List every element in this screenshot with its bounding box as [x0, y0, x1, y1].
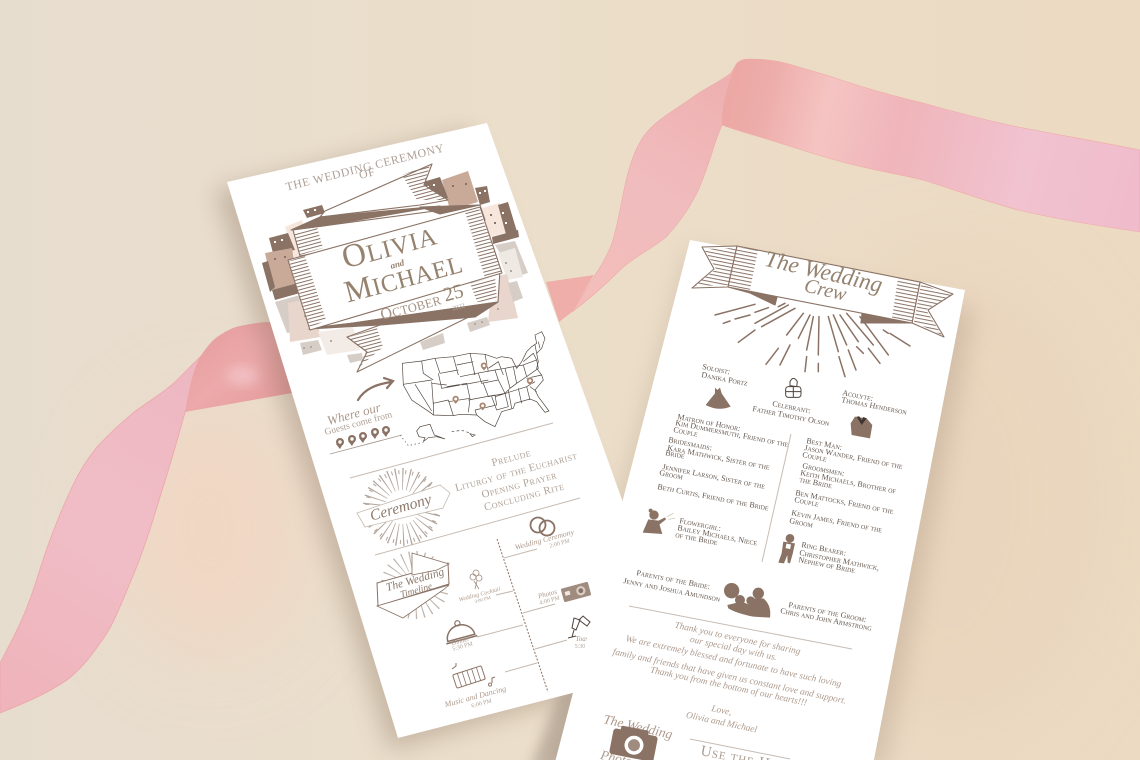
column divider	[762, 434, 791, 562]
arrow to map	[358, 378, 393, 400]
names: Olivia and Michael	[338, 216, 466, 309]
left card: ceremony program	[227, 123, 681, 738]
flower girl label: Flowergirl:	[679, 516, 722, 533]
event: dinner: 5:30 PM	[452, 641, 474, 653]
badge: ceremony	[357, 472, 450, 542]
badge: ceremony: Ceremony	[368, 491, 434, 525]
order of service list: Prelude	[490, 447, 532, 469]
map of the USA	[402, 332, 549, 427]
bride's attendants: Jennifer Larson, Sister of the	[662, 462, 766, 491]
date: October 25 2022: 2022	[451, 302, 466, 313]
ribbon: centre strand back piece	[546, 275, 594, 322]
ring bearer label: Christopher Mathwick,	[799, 548, 880, 572]
event: wedding cocktail: Wedding Cocktail	[458, 587, 501, 603]
bride's attendants: Matron of Honor:	[677, 412, 741, 433]
names: Olivia and Michael: OLIVIA	[338, 216, 441, 276]
thank you message: Thank you to everyone for sharing	[674, 620, 802, 657]
order of service list: Concluding Rite	[483, 481, 566, 514]
groom's attendants: Best Man:	[806, 436, 843, 452]
alaska and hawaii	[400, 424, 475, 446]
banner: the wedding crew	[692, 246, 953, 337]
icon: parents	[724, 583, 770, 618]
parents of the bride: Jenny and Joshua Amundson	[623, 576, 722, 604]
names: Olivia and Michael: MICHAEL	[340, 244, 466, 309]
map pins	[452, 362, 533, 411]
banner title: The Wedding	[762, 246, 885, 297]
event: dinner: Dinner	[450, 636, 471, 648]
event: toast	[568, 616, 596, 650]
solo roles: Thomas Henderson	[841, 395, 908, 417]
solo roles: Acolyte:	[842, 388, 874, 403]
thank you message: Thank you from the bottom of our hearts!!!	[649, 665, 808, 709]
groom's attendants: Kevin James, Friend of the	[791, 508, 883, 535]
solo roles: Danika Portz	[701, 370, 749, 388]
thank you message: our special day with us.	[689, 635, 778, 663]
flower girl label: Bailey Michaels, Niece	[677, 523, 758, 548]
card sheet	[553, 240, 965, 760]
groom's attendants: Jason Wander, Friend of the	[804, 443, 904, 471]
groom's attendants: Ben Mattocks, Friend of the	[795, 488, 895, 516]
bride's attendants: Beth Curtis, Friend of the Bride	[657, 482, 770, 513]
badge: the wedding timeline: The Wedding	[385, 566, 446, 594]
order of service list	[454, 447, 579, 514]
event: wedding ceremony: Wedding Ceremony	[514, 527, 575, 552]
groom's attendants: the Bride	[799, 475, 833, 490]
parents of the groom: Parents of the Groom:	[788, 600, 867, 624]
event: music and dancing	[443, 663, 507, 710]
date: October 25 2022: OCTOBER	[379, 291, 443, 324]
thank you message: Olivia and Michael	[685, 711, 758, 736]
bride's attendants: Groom	[659, 468, 684, 482]
banner title: Crew	[802, 275, 849, 306]
right card shadow on table	[545, 250, 975, 760]
event: wedding cocktail: 3:00 PM	[474, 596, 492, 605]
names: Olivia and Michael: and	[389, 257, 406, 271]
solo roles	[701, 362, 908, 428]
sunburst rays	[715, 303, 910, 377]
guest pins row	[330, 426, 402, 454]
bride's attendants: Bridesmaids:	[668, 435, 713, 452]
solo roles: Father Timothy Olson	[752, 404, 831, 428]
event: dinner	[441, 617, 477, 653]
event: toast: 5:30 PM	[575, 644, 596, 650]
bride's attendants	[657, 412, 790, 513]
where our guests come from: Guests come from	[323, 409, 394, 438]
bride's attendants: Kim Dummersmuth, Friend of the	[675, 418, 790, 449]
heading: the wedding ceremony of: THE WEDDING CEREMONY	[284, 141, 446, 194]
ribbon: left fold loop	[185, 322, 292, 412]
order of service list: Liturgy of the Eucharist	[454, 450, 579, 494]
groom's attendants: Keith Michaels, Brother of	[800, 468, 897, 496]
flower girl label: of the Bride	[675, 530, 719, 547]
ribbon: long left strand	[0, 357, 200, 713]
right card: wedding crew	[553, 240, 965, 760]
icon: jacket	[851, 416, 872, 438]
badge: the wedding timeline: Timeline	[399, 582, 434, 600]
event: wedding ceremony: 2:00 PM	[549, 538, 571, 550]
card sheet	[227, 123, 681, 738]
ring bearer label: Ring Bearer:	[801, 540, 847, 558]
order of service list: Opening Prayer	[480, 469, 558, 501]
solo roles: Celebrant:	[772, 399, 812, 415]
parents of the groom: Chris and John Armstrong	[780, 606, 873, 633]
solo roles: Soloist:	[702, 362, 731, 376]
icon: flower girl	[643, 509, 675, 534]
timeline spine and branches	[477, 539, 567, 692]
badge: the wedding timeline	[377, 553, 449, 618]
event: wedding cocktail	[458, 570, 501, 605]
date: October 25 2022	[379, 280, 466, 324]
thank you message: We are extremely blessed and fortunate to have such loving	[625, 633, 843, 690]
ribbon: centre strand	[572, 63, 737, 312]
bride's attendants: Bride	[665, 448, 686, 461]
event: photos: Photos	[536, 588, 558, 601]
event: photos	[536, 582, 591, 607]
groom's attendants: Groomsmen:	[802, 461, 845, 478]
heading: the wedding ceremony of: OF	[357, 164, 377, 182]
groom's attendants: Couple	[794, 495, 820, 509]
thank you message: family and friends that have given us constant love and support.	[612, 646, 847, 707]
icon: ring bearer	[778, 534, 795, 563]
ribbon: top right band	[722, 59, 1140, 232]
icon: camera	[609, 724, 659, 760]
groom's attendants: Couple	[802, 450, 828, 464]
event: photos: 4:00 PM	[539, 595, 561, 607]
thank you message	[612, 620, 847, 736]
wedding photos heading: The Wedding	[602, 711, 674, 742]
bride's attendants: Kara Mathwick, Sister of the	[667, 443, 771, 472]
thank you message: Love,	[709, 704, 732, 718]
left card shadow	[215, 130, 600, 750]
event: toast: Toast	[576, 635, 592, 643]
ring bearer label: Nephew of Bride	[798, 555, 856, 575]
illustration: name banner	[288, 164, 502, 372]
groom's attendants: Groom	[789, 516, 814, 530]
icon: dress	[706, 388, 731, 409]
shadow between the cards	[530, 650, 640, 760]
event: music and dancing: 6:00 PM	[471, 698, 493, 710]
where our guests come from: Where our	[325, 399, 383, 428]
icon: celebrant	[786, 378, 801, 397]
bride's attendants: Couple	[673, 425, 699, 439]
groom's attendants	[789, 436, 904, 535]
event: music and dancing: Music and Dancing	[443, 684, 507, 709]
wedding photos heading	[598, 711, 674, 760]
parents of the bride: Parents of the Bride:	[636, 568, 711, 591]
date: October 25 2022: 25	[441, 280, 466, 306]
illustration: town buildings	[262, 171, 528, 363]
ring bearer label	[798, 540, 880, 575]
